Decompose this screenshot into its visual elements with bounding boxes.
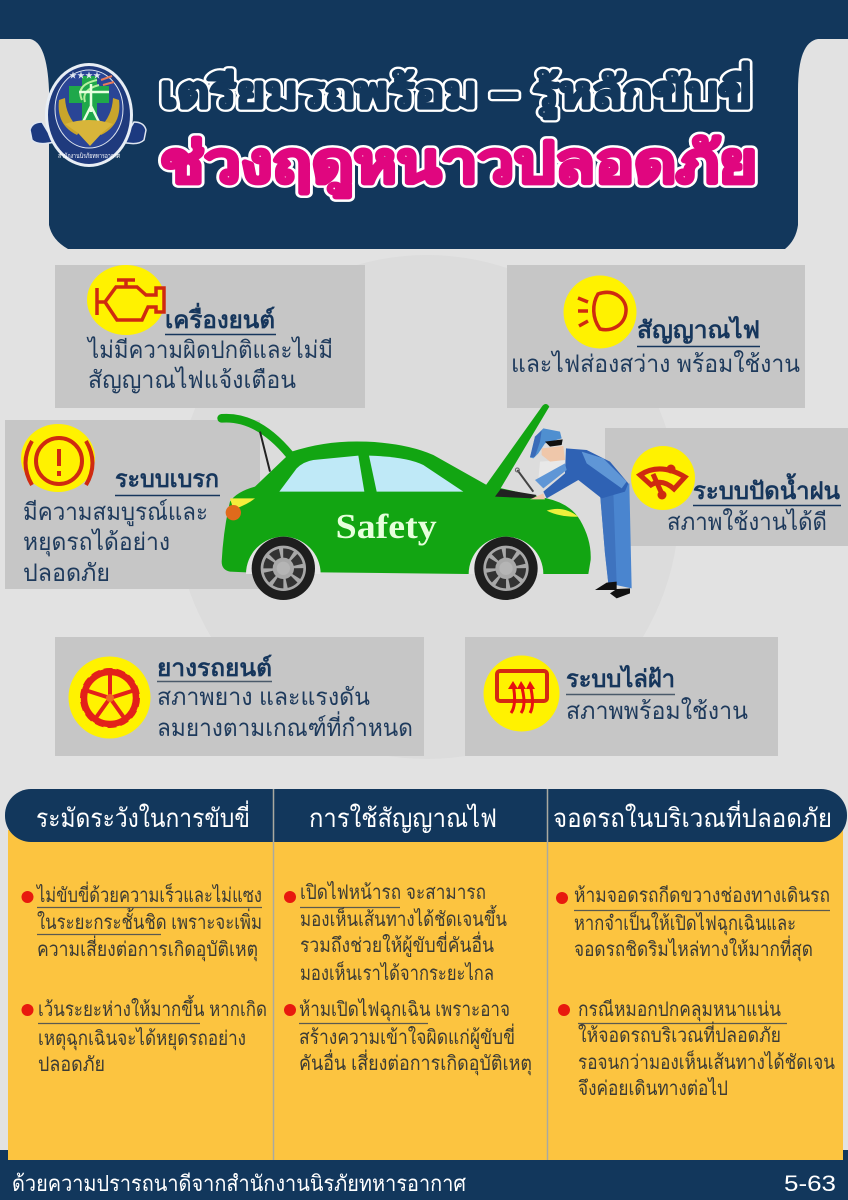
tyres text: สภาพยาง และแรงดัน [157,684,370,711]
car body [222,404,591,574]
column 1 advice: เหตุฉุกเฉินจะได้หยุดรถอย่าง [38,1027,246,1051]
column 3 advice [556,885,835,1100]
column 3 advice: จึงค่อยเดินทางต่อไป [578,1077,728,1100]
brakes text: มีความสมบูรณ์และ [23,498,208,527]
engine text: สัญญาณไฟแจ้งเตือน [88,366,296,394]
panel: driving advice table [5,789,847,1160]
column 1 advice: ความเสี่ยงต่อการเกิดอุบัติเหตุ [37,935,258,962]
icon: engine warning light [87,265,165,335]
icon: rear defroster [484,656,560,732]
column 3 advice: จอดรถชิดริมไหล่ทางให้มากที่สุด [574,935,813,962]
brakes text: หยุดรถได้อย่าง [23,528,170,557]
car windows [279,456,463,492]
column 1 advice [22,881,267,1076]
icon: brake warning light [21,424,95,492]
tyres text: ลมยางตามเกณฑ์ที่กำหนด [157,711,413,742]
engine text: ไม่มีความผิดปกติและไม่มี [86,336,333,364]
engine text [86,336,333,394]
lights heading: สัญญาณไฟ [637,315,760,344]
column 1 advice: เว้นระยะห่างให้มากขึ้น หากเกิด [38,995,267,1021]
tyres heading: ยางรถยนต์ [157,654,272,682]
panel: defroster [465,637,778,756]
panel: engine [55,265,365,408]
logo: air force safety emblem [30,63,146,167]
lights text: และไฟส่องสว่าง พร้อมใช้งาน [511,350,800,378]
title line 2: ช่วงฤดูหนาวปลอดภัย [160,131,757,198]
icon: windshield wiper [631,446,695,510]
column 3 heading: จอดรถในบริเวณที่ปลอดภัย [553,800,832,833]
defroster heading: ระบบไล่ฝ้า [566,664,675,693]
column 2 advice: มองเห็นเส้นทางได้ชัดเจนขึ้น [300,905,507,931]
tyres text [157,684,413,742]
column 1 advice: ไม่ขับขี่ด้วยความเร็วและไม่แซง [35,881,262,907]
emblem ribbon text: สำนักงานนิรภัยทหารอากาศ [58,152,120,160]
column 1 advice: ปลอดภัย [38,1054,105,1076]
column 2 advice: ห้ามเปิดไฟฉุกเฉิน เพราะอาจ [299,998,510,1022]
defroster text: สภาพพร้อมใช้งาน [566,697,748,725]
car lights [226,489,578,520]
column 3 advice: หากจำเป็นให้เปิดไฟฉุกเฉินและ [574,910,796,936]
wheels [246,537,543,600]
column 2 advice: คันอื่น เสี่ยงต่อการเกิดอุบัติเหตุ [299,1049,532,1076]
panel: lights [507,265,805,408]
column 2 advice: สร้างความเข้าใจผิดแก่ผู้ขับขี่ [299,1023,515,1050]
column 3 advice: กรณีหมอกปกคลุมหนาแน่น [578,999,781,1022]
column 2 advice: เปิดไฟหน้ารถ จะสามารถ [300,881,486,904]
engine heading: เครื่องยนต์ [165,302,275,334]
safety lettering: Safety [336,507,437,546]
wipers text: สภาพใช้งานได้ดี [667,508,827,536]
column 1 heading: ระมัดระวังในการขับขี่ [36,800,250,833]
wipers heading: ระบบปัดน้ำฝน [693,472,841,505]
title line 1: เตรียมรถพร้อม – รู้หลักขับขี่ [160,62,752,119]
column 2 advice: มองเห็นเราได้จากระยะไกล [300,960,494,985]
brakes text: ปลอดภัย [23,560,110,587]
header banner [0,0,848,249]
brakes heading: ระบบเบรก [115,466,219,493]
title line 2: ช่วงฤดูหนาวปลอดภัย [160,131,757,198]
issue number: 5-63 [784,1171,836,1196]
panel: brakes [5,420,260,589]
column 2 heading: การใช้สัญญาณไฟ [309,803,497,833]
title line 1: เตรียมรถพร้อม – รู้หลักขับขี่ [160,62,752,119]
column 1 advice: ในระยะกระชั้นชิด เพราะจะเพิ่ม [37,908,262,934]
brakes text [23,498,208,587]
column 3 advice: ให้จอดรถบริเวณที่ปลอดภัย [578,1021,781,1047]
footer credit: ด้วยความปรารถนาดีจากสำนักงานนิรภัยทหารอากาศ [12,1171,466,1196]
panel: wipers [605,428,848,546]
illustration: car with mechanic [222,404,632,600]
footer [0,1150,848,1200]
panel: tyres [55,637,424,756]
icon: wheel [68,656,150,738]
icon: headlight [564,276,636,348]
mechanic [515,428,632,598]
logo: air force safety emblem: ★★★★ [69,71,101,80]
column 2 advice: รวมถึงช่วยให้ผู้ขับขี่คันอื่น [300,931,494,958]
column 2 advice [284,881,532,1076]
